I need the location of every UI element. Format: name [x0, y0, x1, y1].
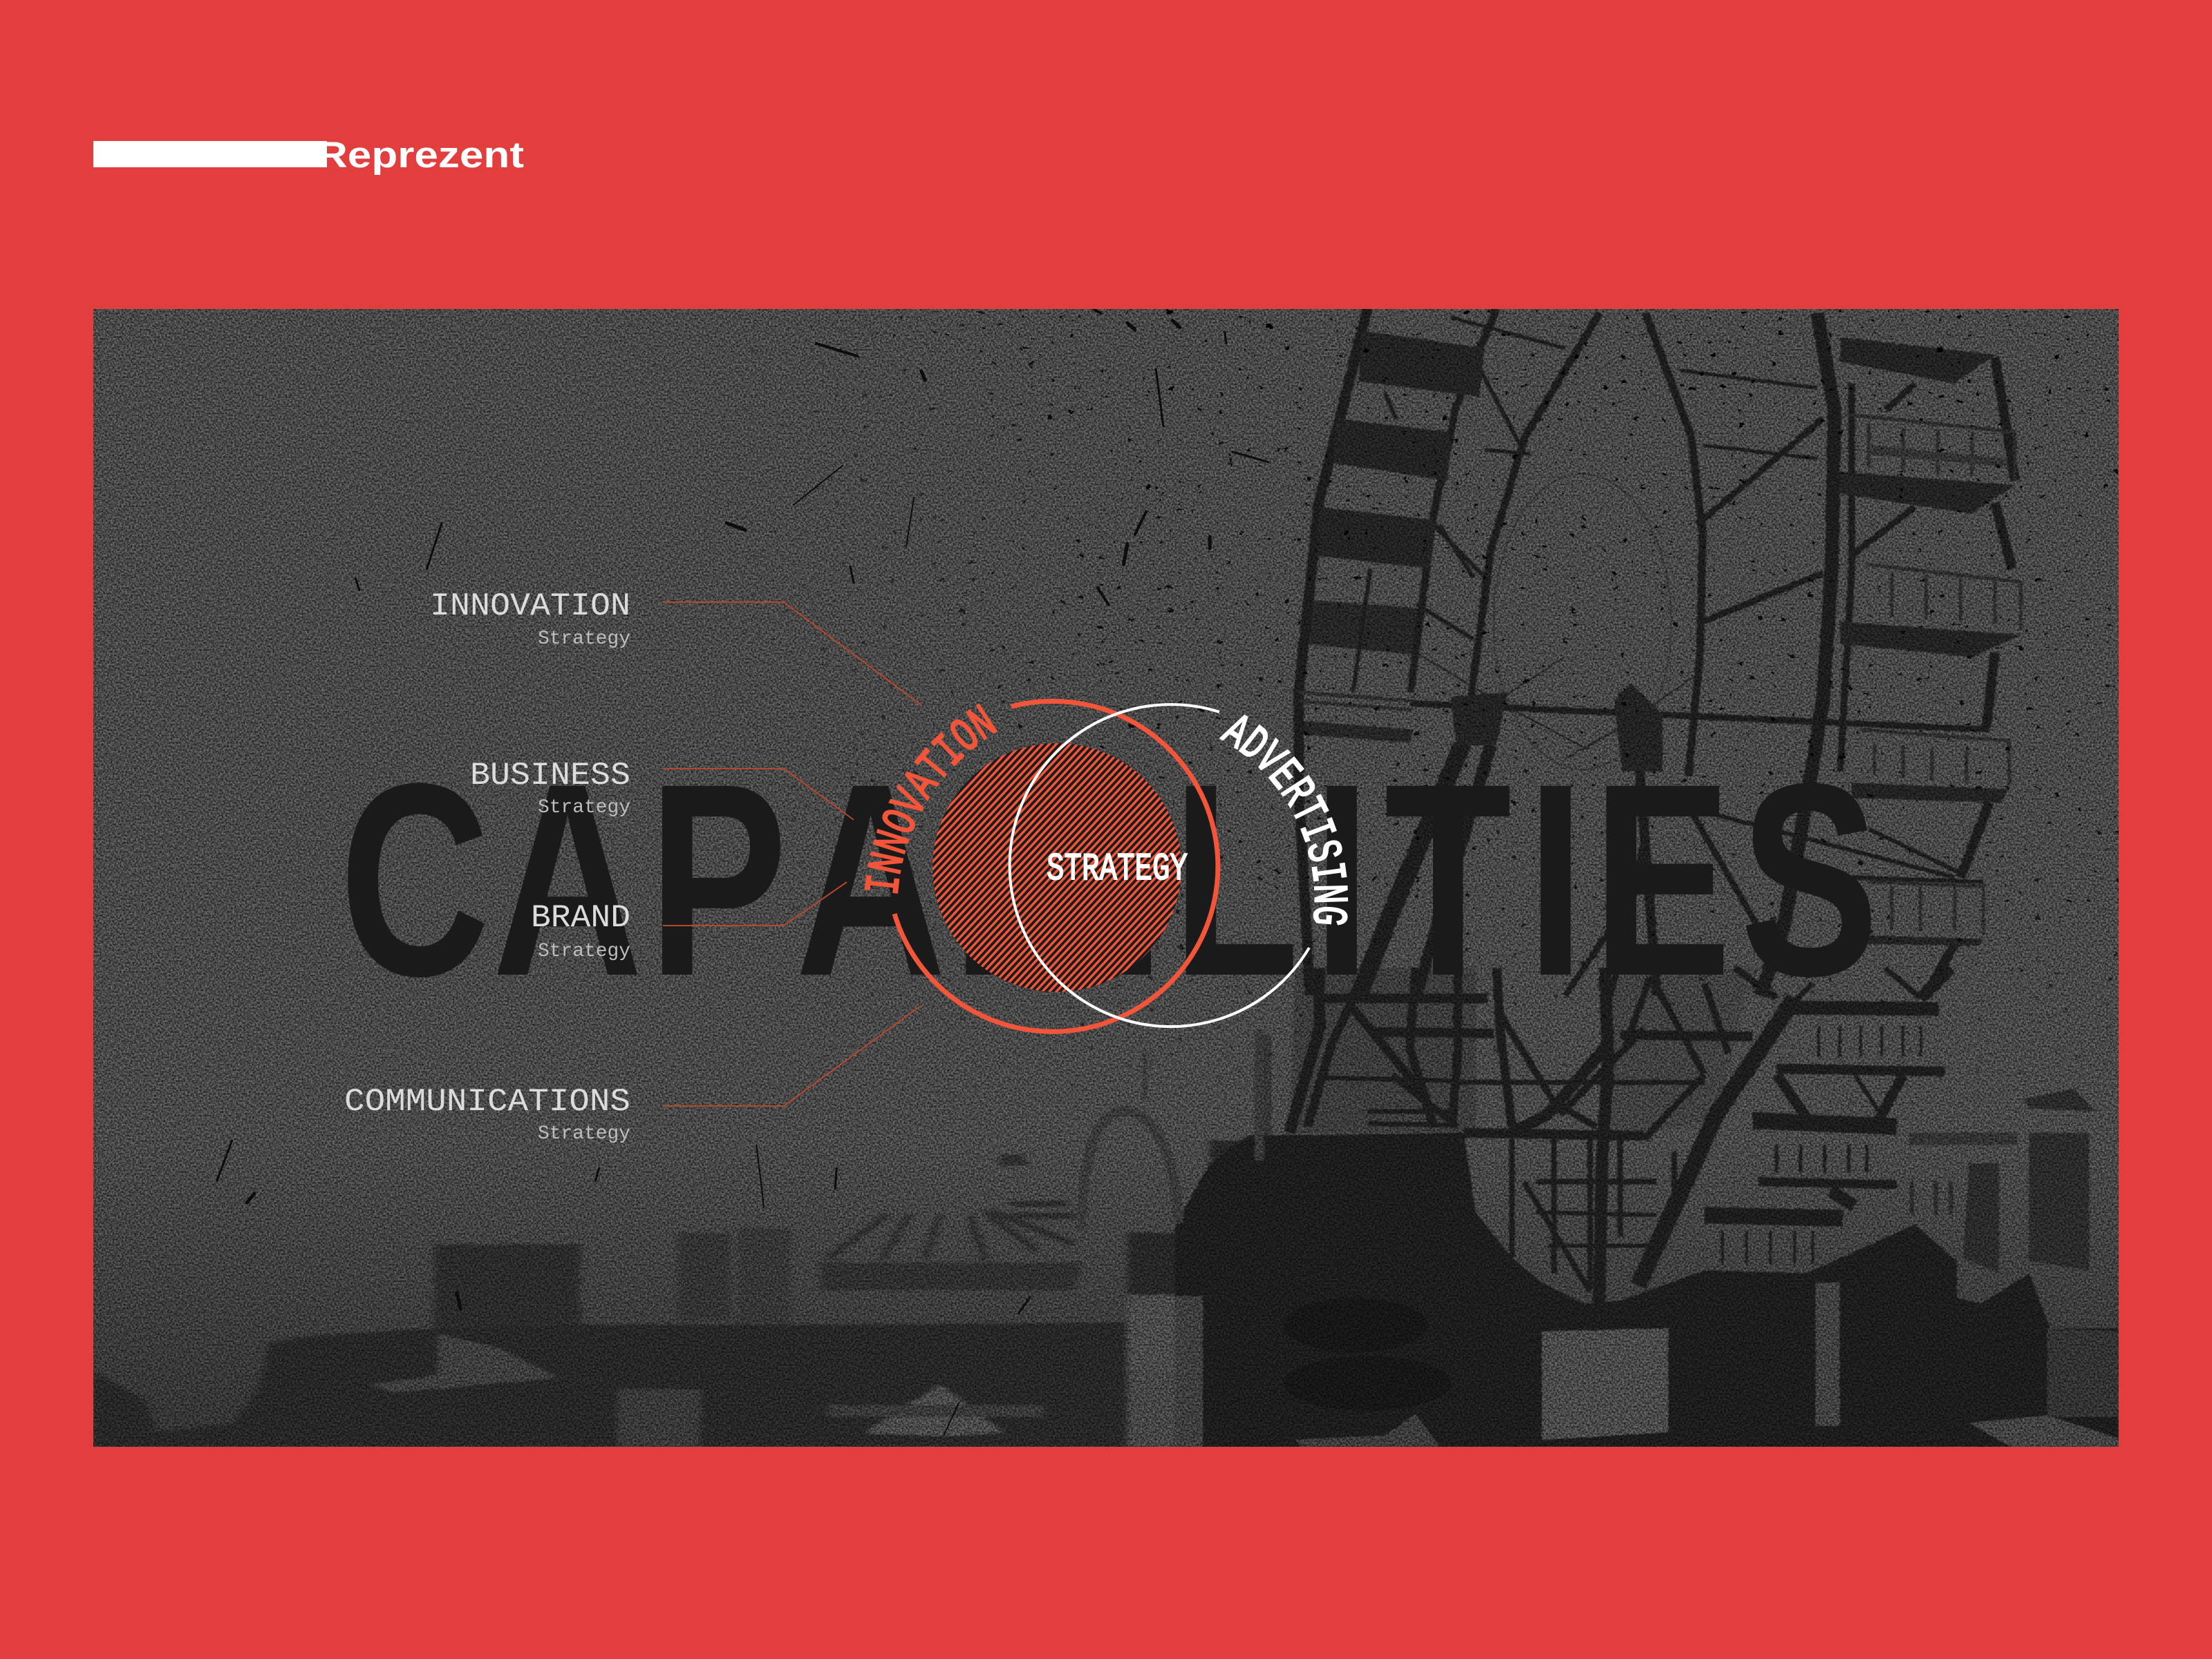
- photo: dome and spires: [1082, 1031, 1259, 1230]
- photo: ferris wheel frame and gondolas: [1299, 308, 2021, 995]
- hatched strategy circle: [932, 743, 1181, 992]
- label: innovation: [430, 588, 630, 650]
- label: business: BUSINESS: [470, 758, 630, 794]
- center label: strategy: STRATEGY: [1047, 847, 1188, 891]
- panel: ferris wheel photo: [93, 308, 2119, 1447]
- label: communications: COMMUNICATIONS: [344, 1084, 630, 1120]
- label: communications: Strategy: [538, 1123, 630, 1145]
- orange ring: [894, 701, 1218, 1031]
- logo: Reprezent wordmark with white bar: [93, 135, 524, 176]
- heading: CAPABILITIES: CAPABILITIES: [339, 727, 1879, 1033]
- photo: right skyline and wheel base: [1175, 968, 2118, 1447]
- label: innovation: Strategy: [538, 628, 630, 650]
- leader line: business: [663, 769, 854, 820]
- leader line: innovation: [663, 602, 922, 706]
- label: business: [470, 758, 630, 818]
- photo grain: [93, 309, 2119, 1447]
- white ring: [1010, 704, 1309, 1027]
- photo: scratches and dust: [93, 309, 2119, 1447]
- label: business: Strategy: [538, 797, 630, 818]
- curved label: advertising: ADVERTISING: [1219, 715, 1348, 925]
- venn diagram: [864, 698, 1348, 1034]
- leader line: communications: [663, 1006, 921, 1106]
- label: brand: BRAND: [531, 900, 630, 936]
- label: brand: [531, 900, 630, 962]
- leader line: brand: [663, 882, 847, 926]
- photo: left skyline and carousel: [93, 1141, 1268, 1447]
- label: innovation: INNOVATION: [430, 588, 630, 624]
- curved label: innovation: INNOVATION: [864, 703, 998, 894]
- label: brand: Strategy: [538, 941, 630, 962]
- label: communications: [344, 1084, 630, 1145]
- logo: Reprezent wordmark with white bar: Reprezent: [317, 135, 524, 176]
